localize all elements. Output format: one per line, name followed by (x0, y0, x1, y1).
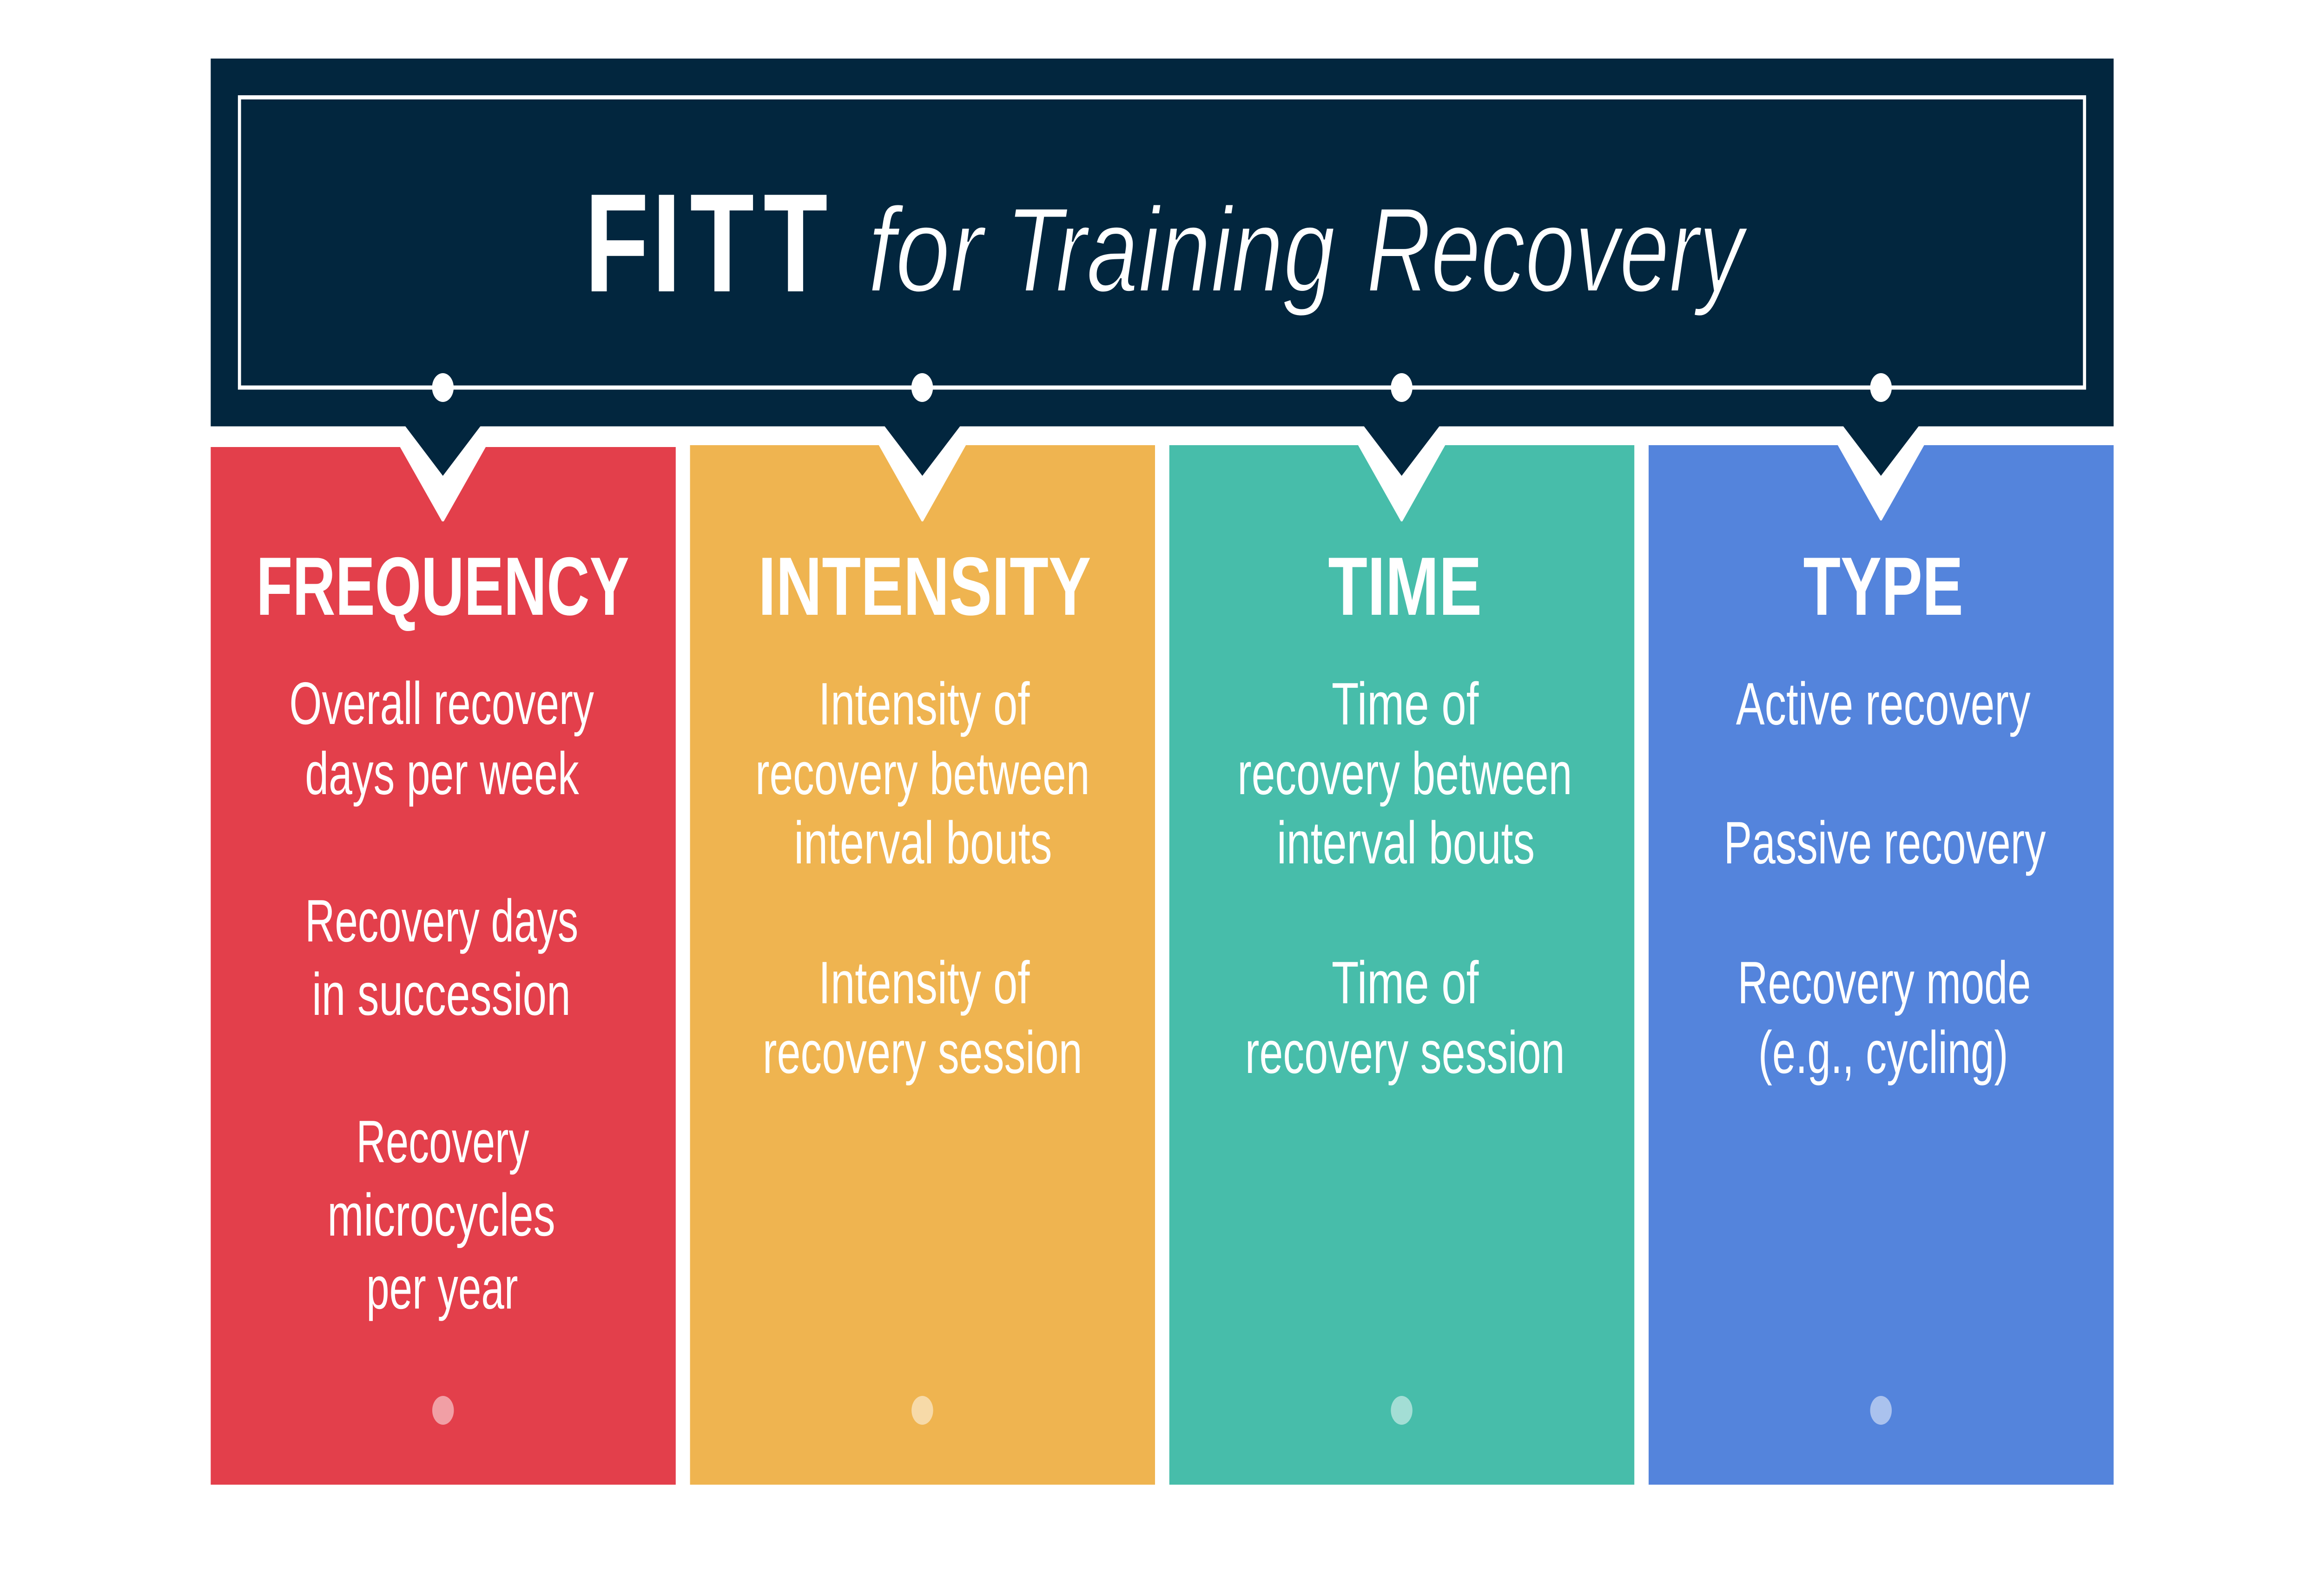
text block: type items: Recovery mode (1738, 950, 2031, 1016)
heading: type: TYPE (1803, 540, 1963, 632)
panel: time (1169, 445, 1634, 1485)
heading: frequency: FREQUENCY (256, 540, 629, 632)
text block: intensity items: recovery between (755, 741, 1089, 807)
dot: frequency (432, 1396, 454, 1425)
text block: intensity items: interval bouts (794, 810, 1052, 876)
text block: intensity items (755, 671, 1089, 1086)
text block: intensity items: Intensity of (819, 671, 1030, 737)
text block: frequency items (289, 671, 594, 1322)
text block: type items: (e.g., cycling) (1758, 1020, 2008, 1086)
notch: type (1838, 445, 1924, 520)
panel: intensity (690, 445, 1155, 1485)
notch: frequency (399, 445, 487, 521)
text block: frequency items: per year (366, 1255, 518, 1322)
text block: frequency items: Recovery (356, 1109, 529, 1175)
text block: frequency items: days per week (305, 741, 579, 807)
dot: time (1391, 1396, 1413, 1425)
text block: time items (1237, 671, 1572, 1086)
title: Recovery (1367, 183, 1748, 317)
text block: frequency items: microcycles (327, 1182, 555, 1249)
text block: frequency items: Recovery days (305, 888, 578, 954)
panel: type (1649, 445, 2113, 1485)
text block: time items: recovery session (1245, 1020, 1565, 1086)
dot: type (1870, 1396, 1892, 1425)
title banner (211, 59, 2113, 476)
text block: time items: interval bouts (1277, 810, 1535, 876)
text block: frequency items: in succession (312, 961, 571, 1028)
text block: time items: Time of (1332, 950, 1479, 1016)
notch: intensity (879, 445, 966, 521)
text block: intensity items: Intensity of (819, 950, 1030, 1016)
text block: frequency items: Overall recovery (289, 671, 594, 737)
dot: intensity (911, 1396, 933, 1425)
banner frame (239, 98, 2085, 388)
text block: time items: Time of (1332, 671, 1479, 737)
title: FITT (585, 164, 828, 321)
panel: frequency (211, 445, 676, 1485)
text block: type items: Passive recovery (1724, 810, 2046, 876)
heading: time: TIME (1328, 540, 1482, 632)
title: for (868, 183, 986, 317)
text block: type items: Active recovery (1736, 671, 2031, 737)
banner dots (432, 373, 1892, 402)
title (585, 164, 1748, 321)
text block: type items (1724, 671, 2046, 1086)
notch: time (1358, 445, 1445, 521)
heading: intensity: INTENSITY (758, 540, 1091, 632)
text block: intensity items: recovery session (763, 1020, 1083, 1086)
text block: time items: recovery between (1237, 741, 1572, 807)
title: Training (1006, 183, 1335, 317)
